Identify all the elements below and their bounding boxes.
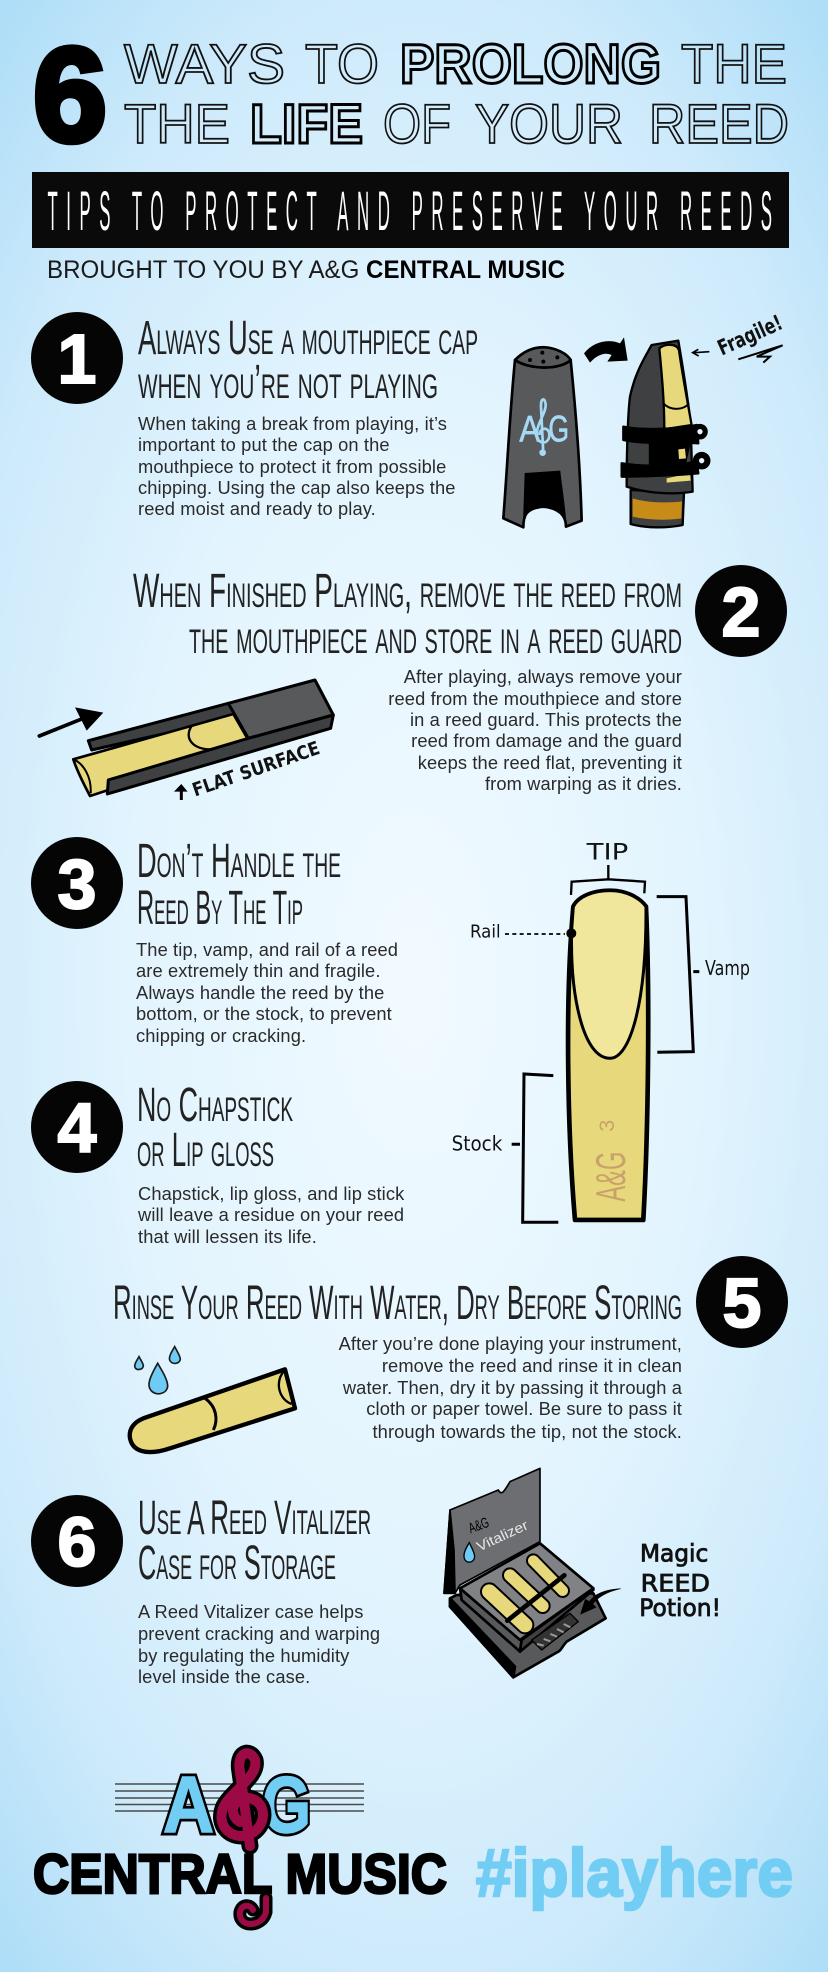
number badge 3: [31, 837, 123, 929]
label: magic reed potion: Potion!: [639, 1594, 721, 1622]
body text 2: After playing, always remove your: [404, 666, 682, 687]
heading 3: Don’t Handle the: [137, 835, 341, 888]
heading 4: No Chapstick: [137, 1079, 293, 1132]
icon: cap: G: [548, 409, 569, 450]
logo letters: A: [163, 1760, 214, 1849]
body text 4: that will lessen its life.: [138, 1226, 317, 1247]
hatch stripes: [537, 1624, 570, 1646]
body text 3: [136, 939, 398, 1046]
heading 4: [137, 1079, 293, 1177]
label: flat surface: FLAT SURFACE: [190, 738, 323, 801]
subtitle banner: TIPS TO PROTECT AND PRESERVE YOUR REEDS: [48, 180, 772, 242]
title line 1: TO: [305, 32, 379, 95]
reed body: A&G: [587, 1152, 634, 1202]
title line 1: PROLONG: [400, 32, 661, 95]
label: vamp: Vamp: [705, 956, 750, 980]
illustration: mouthpiece cap and mouthpiece: [503, 311, 787, 527]
title line 1: [124, 32, 787, 95]
arrow: to potion: [581, 1589, 621, 1614]
number badge 3: 3: [58, 845, 96, 923]
heading 6: Case for Storage: [138, 1537, 336, 1590]
panel: step 5: [113, 1256, 788, 1452]
number badge 4: 4: [58, 1089, 97, 1167]
label: stock: Stock: [452, 1132, 502, 1156]
illustration: reed guard: [39, 680, 333, 801]
reed body: 3: [595, 1120, 619, 1132]
title line 2: [124, 92, 789, 155]
label: rail: Rail: [470, 922, 501, 942]
logo treble clef: [222, 1753, 266, 1924]
reed body: [566, 891, 648, 1220]
label: stock: [452, 1074, 558, 1222]
number badge 1: 1: [58, 320, 96, 398]
title line 2: YOUR: [475, 92, 623, 155]
illustration: reed vitalizer case: [444, 1468, 721, 1677]
body text 4: [137, 1183, 405, 1247]
logo letters: G: [262, 1760, 311, 1849]
case lettering: [464, 1515, 531, 1562]
number badge 4: [31, 1081, 123, 1173]
title line 2: REED: [649, 92, 789, 155]
heading 2: [133, 565, 682, 664]
body text 4: Chapstick, lip gloss, and lip stick: [138, 1183, 405, 1204]
illustration: wet reed: [130, 1347, 295, 1452]
number badge 2: [695, 565, 787, 657]
number badge 2: 2: [722, 573, 760, 651]
number badge 6: [31, 1495, 123, 1587]
title line 1: THE: [681, 32, 787, 95]
body text 5: remove the reed and rinse it in clean: [382, 1355, 682, 1376]
heading 1: [138, 312, 478, 409]
body text 4: will leave a residue on your reed: [137, 1204, 404, 1225]
number badge 5: [696, 1256, 788, 1348]
arrow: direction: [39, 707, 103, 736]
body text 5: through towards the tip, not the stock.: [372, 1421, 682, 1442]
title line 1: WAYS: [124, 32, 285, 95]
number badge 1: [31, 312, 123, 404]
label: vamp: [657, 897, 750, 1052]
hashtag: #iplayhere: [476, 1835, 793, 1911]
label: fragile: [693, 311, 787, 363]
body text 3: chipping or cracking.: [136, 1025, 306, 1046]
panel: step 3: [31, 835, 398, 1046]
brand name: CENTRAL MUSIC: [33, 1842, 447, 1905]
label: tip: TIP: [585, 840, 628, 865]
label: magic reed potion: Magic: [640, 1540, 708, 1568]
footer logo: [33, 1753, 447, 1924]
body text 6: [138, 1601, 380, 1687]
body text 2: reed from damage and the guard: [411, 730, 682, 751]
heading 1: Always Use a mouthpiece cap: [138, 312, 478, 365]
heading 4: or Lip gloss: [137, 1124, 274, 1177]
case lettering: A&G: [467, 1515, 491, 1537]
heading 3: [137, 835, 341, 935]
body text 3: bottom, or the stock, to prevent: [136, 1003, 392, 1024]
body text 6: A Reed Vitalizer case helps: [138, 1601, 363, 1622]
body text 2: from warping as it dries.: [485, 773, 682, 794]
icon: water drops: [135, 1347, 180, 1394]
number badge 5: 5: [723, 1264, 761, 1342]
body text 1: When taking a break from playing, it’s: [138, 413, 447, 434]
title line 2: OF: [383, 92, 451, 155]
big number 6: 6: [33, 21, 107, 170]
case lettering: Vitalizer: [474, 1516, 531, 1554]
body text 1: chipping. Using the cap also keeps the: [138, 477, 456, 498]
body text 2: [388, 666, 682, 794]
title: [33, 21, 789, 170]
title line 2: LIFE: [250, 92, 363, 155]
heading 6: [138, 1492, 371, 1590]
panel: step 1: [31, 311, 787, 527]
body text 1: reed moist and ready to play.: [138, 498, 376, 519]
body text 6: by regulating the humidity: [138, 1645, 350, 1666]
panel: step 2: [39, 565, 787, 801]
panel: step 4: [31, 1079, 405, 1247]
reeds in tray: [489, 1561, 564, 1625]
heading 1: when you’re not playing: [138, 356, 438, 409]
icon: mouthpiece: [622, 341, 709, 527]
reed: [130, 1369, 295, 1452]
icon: cap: [503, 347, 582, 527]
body text 3: are extremely thin and fragile.: [136, 960, 381, 981]
label: magic reed potion: [639, 1540, 721, 1622]
body text 2: keeps the reed flat, preventing it: [418, 752, 682, 773]
case base and tray: [450, 1543, 606, 1677]
byline: BROUGHT TO YOU BY A&G CENTRAL MUSIC: [47, 256, 565, 284]
body text 5: cloth or paper towel. Be sure to pass it: [366, 1398, 682, 1419]
logo letters: [163, 1760, 311, 1849]
number badge 6: 6: [58, 1503, 96, 1581]
logo letters: A: [163, 1760, 214, 1849]
guard and reed: [73, 680, 333, 796]
label: magic reed potion: REED: [641, 1570, 710, 1598]
label: tip: [571, 840, 645, 895]
label: fragile: Fragile!: [714, 311, 787, 361]
body text 3: Always handle the reed by the: [136, 982, 384, 1003]
body text 6: level inside the case.: [138, 1666, 310, 1687]
label: rail: [470, 922, 565, 942]
body text 3: The tip, vamp, and rail of a reed: [136, 939, 398, 960]
staff lines: [115, 1784, 364, 1811]
panel: step 6: [31, 1468, 721, 1687]
arrow: curved: [584, 337, 628, 363]
title line 2: THE: [124, 92, 230, 155]
logo letters: G: [262, 1760, 311, 1849]
icon: cap: A: [519, 409, 540, 450]
body text 5: water. Then, dry it by passing it through a: [342, 1377, 683, 1398]
body text 2: reed from the mouthpiece and store: [388, 688, 682, 709]
body text 6: prevent cracking and warping: [138, 1623, 380, 1644]
body text 5: [339, 1333, 683, 1442]
illustration: reed anatomy: [452, 840, 750, 1222]
body text 5: After you’re done playing your instrument,: [339, 1333, 682, 1354]
body text 1: [138, 413, 456, 519]
body text 1: important to put the cap on the: [138, 434, 390, 455]
body text 2: in a reed guard. This protects the: [410, 709, 682, 730]
case lid: [444, 1468, 540, 1593]
body text 1: mouthpiece to protect it from possible: [138, 456, 446, 477]
heading 6: Use A Reed Vitalizer: [138, 1492, 371, 1545]
heading 3: Reed By The Tip: [137, 882, 303, 935]
